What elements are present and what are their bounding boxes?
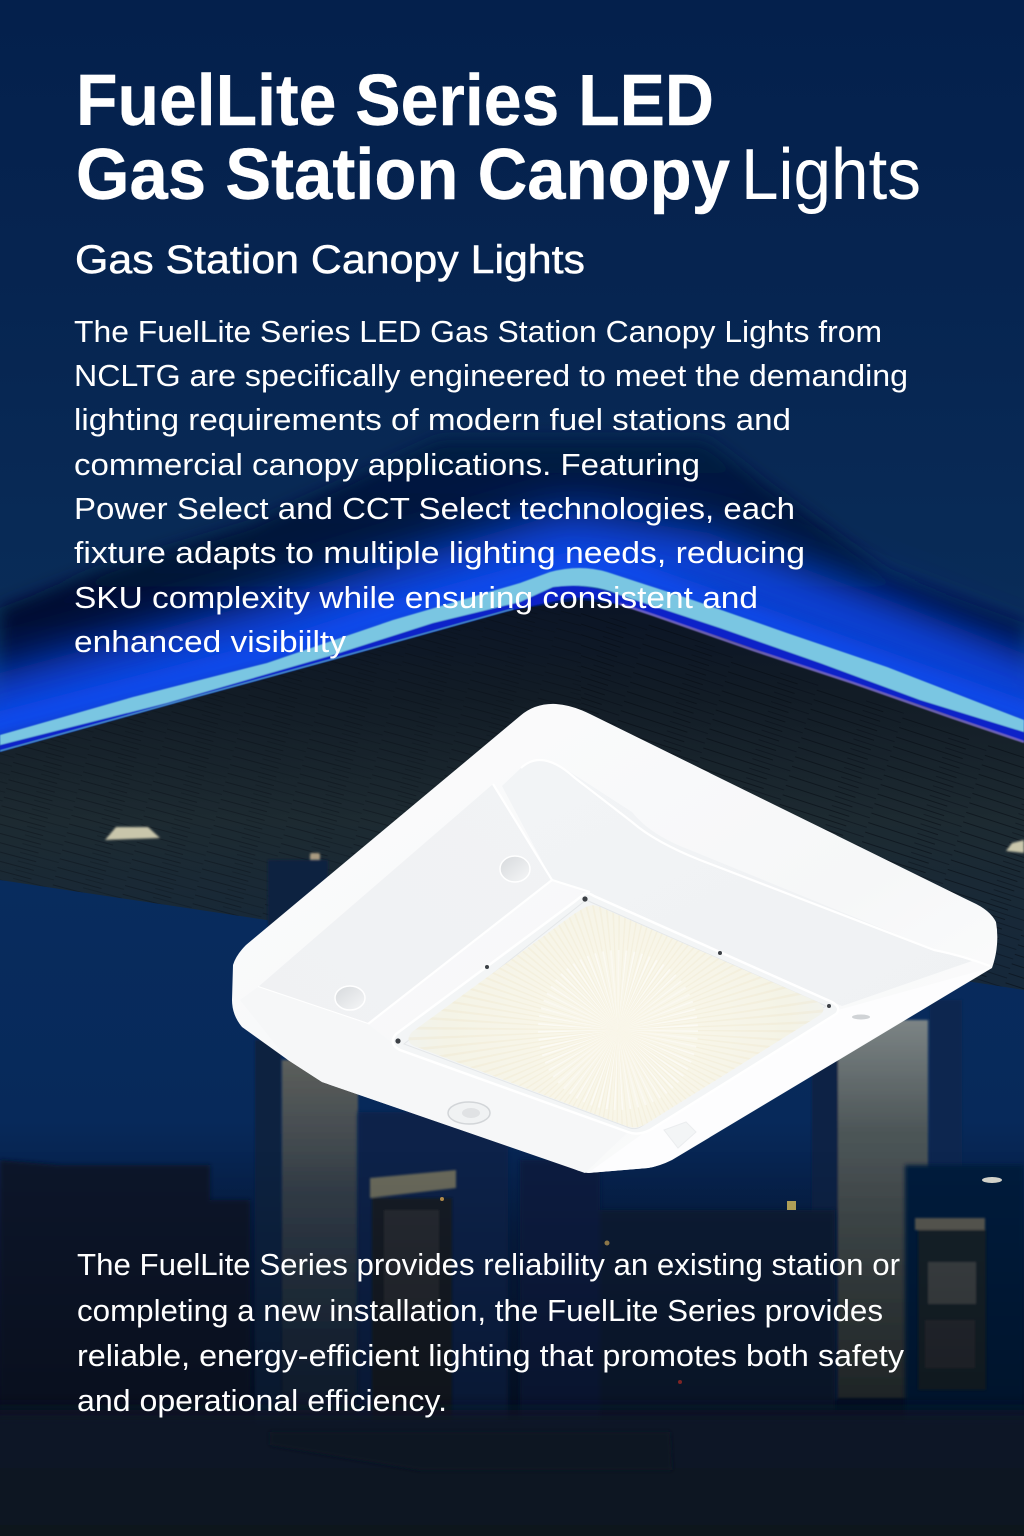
intro paragraph: enhanced visibiilty	[74, 624, 347, 659]
sensor	[448, 1102, 490, 1124]
lower facets	[240, 987, 628, 1173]
top surface	[502, 761, 975, 1006]
intro paragraph: fixture adapts to multiple lighting needs, reducing	[74, 535, 805, 570]
intro paragraph	[74, 314, 908, 659]
intro paragraph: SKU complexity while ensuring consistent and	[74, 580, 758, 615]
intro paragraph: The FuelLite Series LED Gas Station Canopy Lights from	[74, 314, 882, 349]
lens frame	[393, 893, 838, 1134]
left pillar	[255, 860, 358, 1430]
intro paragraph: Power Select and CCT Select technologies, each	[74, 491, 795, 526]
closing paragraph	[77, 1247, 905, 1418]
bevel highlights	[258, 760, 990, 1060]
intro paragraph: lighting requirements of modern fuel stations and	[74, 402, 791, 437]
intro paragraph: commercial canopy applications. Featuring	[74, 447, 700, 482]
small lights	[440, 1177, 1002, 1384]
right pillar	[812, 1000, 962, 1400]
fixture body	[232, 704, 997, 1173]
title: FuelLite Series LED	[76, 61, 714, 141]
screws	[395, 896, 831, 1044]
side panel	[258, 784, 552, 1023]
canopy ceiling	[0, 600, 1024, 990]
fuel pumps	[370, 1170, 986, 1423]
dimples	[335, 856, 530, 1010]
title: Lights	[741, 135, 921, 215]
product: LED canopy fixture	[232, 704, 997, 1173]
background buildings	[0, 1112, 1024, 1435]
ground	[0, 1150, 1024, 1536]
closing paragraph: completing a new installation, the FuelLite Series provides	[77, 1293, 883, 1328]
canopy light band	[0, 568, 1024, 752]
closing paragraph: and operational efficiency.	[77, 1383, 447, 1418]
title: Gas Station Canopy	[76, 135, 730, 215]
title	[76, 61, 921, 215]
subtitle: Gas Station Canopy Lights	[75, 238, 585, 282]
closing paragraph: reliable, energy-efficient lighting that promotes both safety	[77, 1338, 905, 1373]
closing paragraph: The FuelLite Series provides reliability an existing station or	[77, 1247, 900, 1282]
lens	[408, 905, 824, 1128]
ceiling lamps	[105, 827, 1024, 866]
intro paragraph: NCLTG are specifically engineered to meet the demanding	[74, 358, 908, 393]
canopy glow	[0, 545, 1024, 718]
clip and vent	[664, 1014, 870, 1148]
